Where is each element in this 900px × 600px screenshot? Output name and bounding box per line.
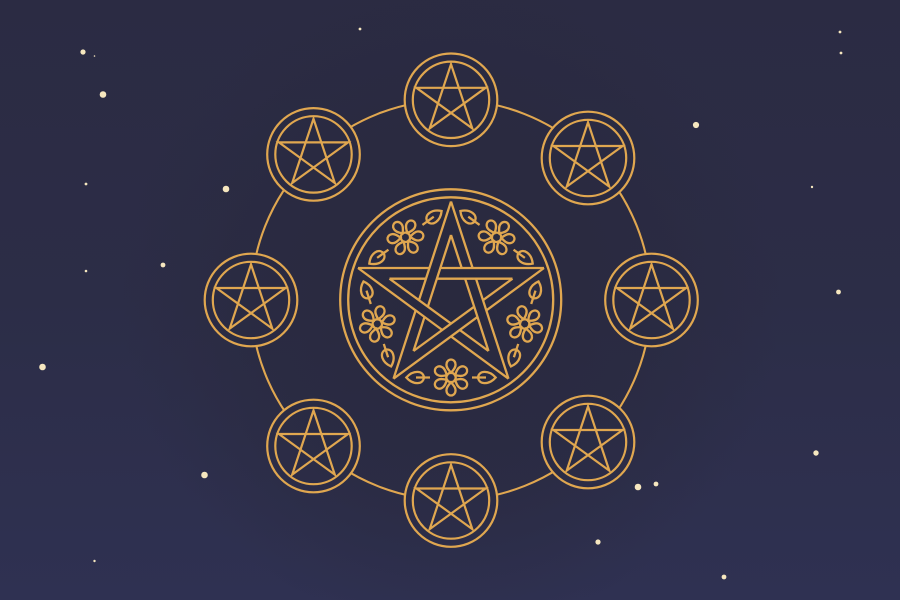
central pentacle xyxy=(340,189,561,410)
small pentacle: right xyxy=(605,254,698,346)
small pentacle: bottom xyxy=(405,454,497,547)
flower and leaves: lower right xyxy=(494,276,556,372)
small pentacle: upper right xyxy=(542,112,634,204)
flower and leaves: upper left xyxy=(359,196,452,278)
flower and leaves: upper right xyxy=(450,196,543,278)
orbit ring xyxy=(251,100,651,500)
flower and leaves: bottom xyxy=(406,360,496,396)
small pentacle: lower right xyxy=(542,396,634,488)
interlaced star xyxy=(358,202,544,379)
small pentacle: lower left xyxy=(267,400,360,492)
small pentacle: top xyxy=(405,54,497,146)
central double circle xyxy=(340,189,561,410)
small pentacle: left xyxy=(205,254,297,346)
small pentacle: upper left xyxy=(267,108,360,201)
flower and leaves: lower left xyxy=(346,276,408,372)
